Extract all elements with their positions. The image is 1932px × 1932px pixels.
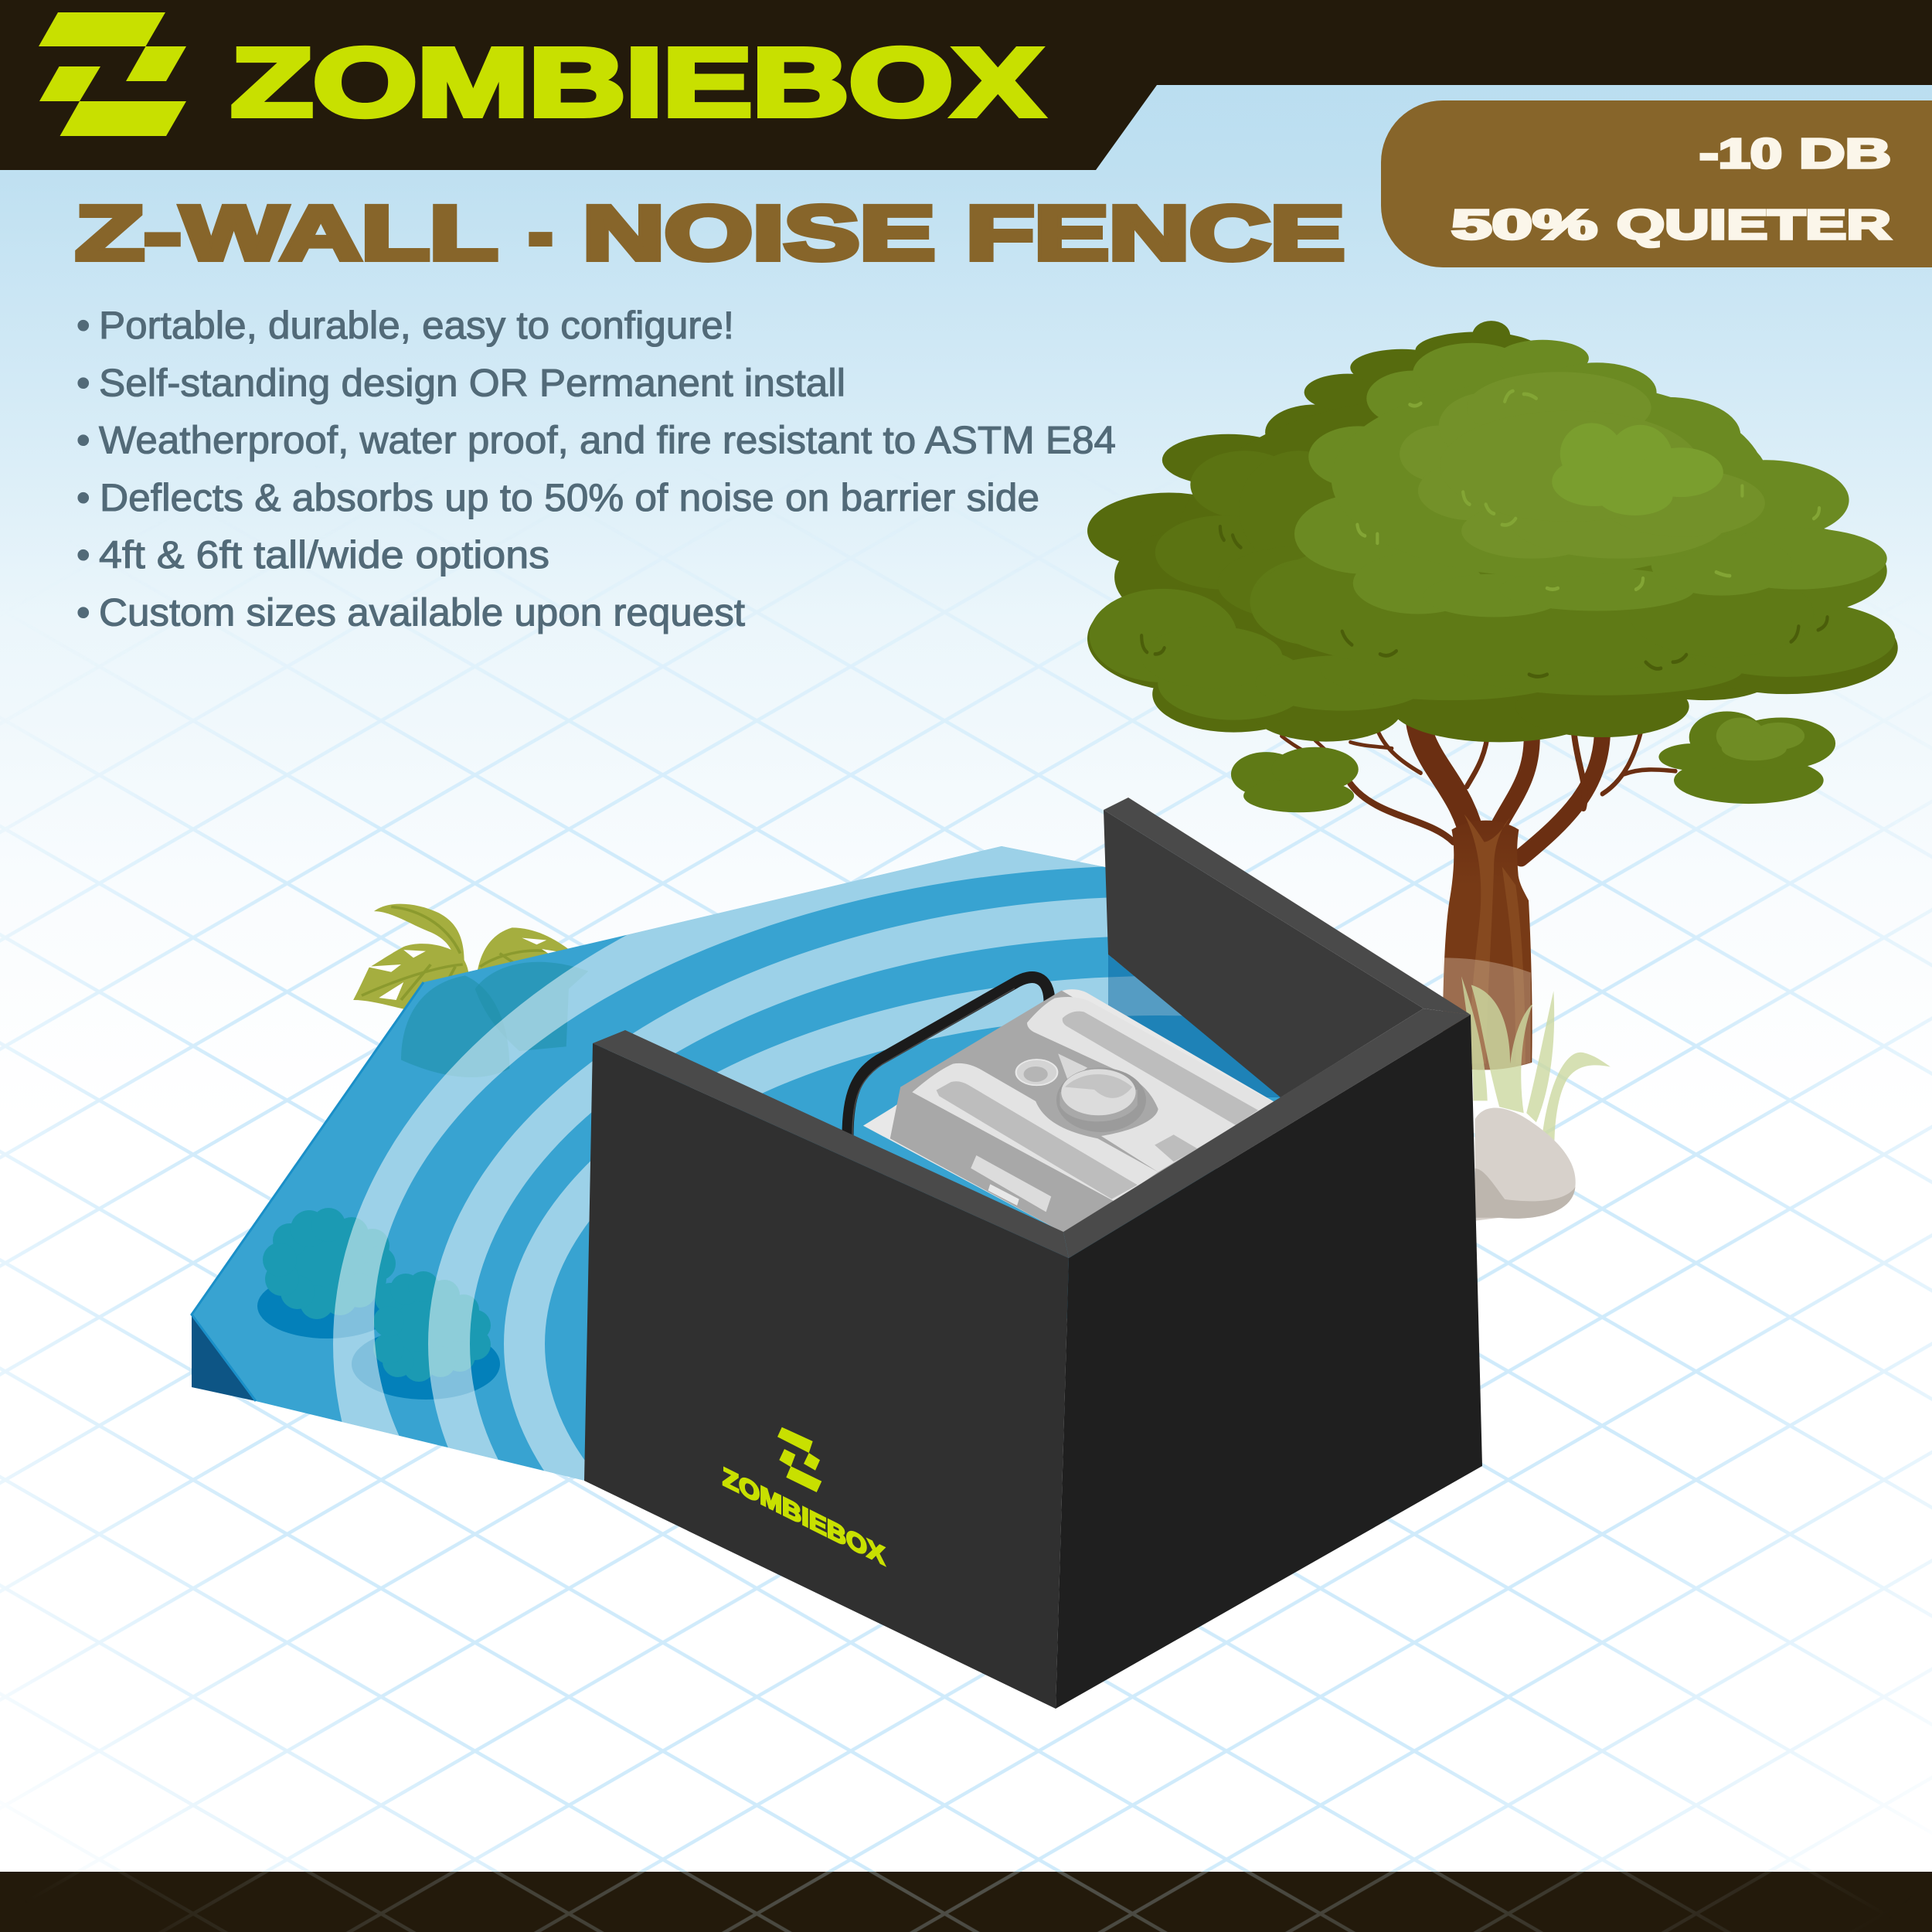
feature bullet list: Custom sizes available upon request <box>99 590 745 634</box>
feature bullet list: • <box>77 362 90 405</box>
title <box>76 190 1345 275</box>
wall shadow on floor <box>1108 954 1283 1097</box>
canopy dark layer <box>1087 321 1898 742</box>
canopy lower mid layer <box>1090 525 1895 720</box>
leaf detail marks <box>1141 391 1828 676</box>
generator base plate <box>863 989 1275 1233</box>
back wall inner face <box>1104 810 1423 1097</box>
title: FENCE <box>966 190 1345 275</box>
badge: noise reduction: -10 <box>1699 131 1782 177</box>
generator gauge <box>1016 1060 1057 1085</box>
plant behind wave <box>353 904 588 1011</box>
front left face <box>584 1043 1069 1709</box>
front wall rim <box>593 1030 1069 1258</box>
noise fence box <box>584 798 1482 1709</box>
title: Z-WALL <box>76 190 498 275</box>
feature bullet list: • <box>77 590 90 634</box>
feature bullet list: Portable, durable, easy to configure! <box>99 304 734 347</box>
small left foliage <box>1231 747 1359 812</box>
wave side fold <box>192 1315 256 1401</box>
brand name: ZOMBIEBOX <box>231 29 1043 136</box>
footer band <box>0 1872 1932 1932</box>
box logo: ZOMBIEBOX <box>723 1462 886 1571</box>
canopy upper mid layer <box>1294 340 1887 617</box>
feature bullet list: • <box>77 533 90 577</box>
small right foliage <box>1658 712 1835 804</box>
plant reflection <box>401 962 588 1077</box>
feature bullet list: Self-standing design OR Permanent install <box>99 362 845 405</box>
wave left edge <box>192 982 423 1401</box>
generator handle <box>848 978 1049 1136</box>
feature bullet list: 4ft & 6ft tall/wide options <box>99 533 549 577</box>
generator labels <box>971 1134 1198 1212</box>
feature bullet list: Weatherproof, water proof, and fire resistant to ASTM E84 <box>99 419 1116 462</box>
generator body <box>890 991 1260 1233</box>
bush left <box>257 1208 396 1338</box>
bush right <box>352 1271 500 1400</box>
badge: noise reduction: 50% <box>1451 202 1597 248</box>
feature bullet list: • <box>77 476 90 519</box>
badge: noise reduction: QUIETER <box>1617 202 1891 248</box>
back wall rim <box>1104 798 1471 1015</box>
right wall rim <box>1063 1009 1471 1258</box>
feature bullet list: • <box>77 304 90 347</box>
generator cap <box>1056 1068 1146 1132</box>
tree trunk <box>1442 815 1532 1070</box>
rock <box>1475 1107 1576 1221</box>
title: NOISE <box>583 190 935 275</box>
feature bullet list <box>77 304 1116 634</box>
sound wave rings <box>333 846 1182 1481</box>
title: - <box>529 190 553 275</box>
canopy left shaded lobes <box>1155 451 1380 621</box>
tree <box>1087 321 1898 1221</box>
feature bullet list: • <box>77 419 90 462</box>
badge: noise reduction <box>1381 100 1932 267</box>
canopy light layer <box>1400 372 1765 559</box>
sound wave floor <box>190 846 1281 1481</box>
isometric floor grid <box>0 588 1932 1872</box>
tree branches <box>1281 706 1675 857</box>
feature bullet list: Deflects & absorbs up to 50% of noise on barrier side <box>100 476 1039 519</box>
badge: noise reduction: DB <box>1799 131 1891 177</box>
canopy highlight <box>1552 423 1723 515</box>
front right face <box>1056 1015 1482 1709</box>
box logo <box>723 1427 886 1571</box>
wave base <box>192 846 1283 1481</box>
generator upper strip <box>1027 997 1274 1172</box>
generator <box>863 989 1275 1233</box>
grass <box>1461 976 1611 1156</box>
generator lower strip <box>912 1063 1158 1202</box>
logo icon <box>39 12 186 136</box>
header band <box>0 0 1932 170</box>
